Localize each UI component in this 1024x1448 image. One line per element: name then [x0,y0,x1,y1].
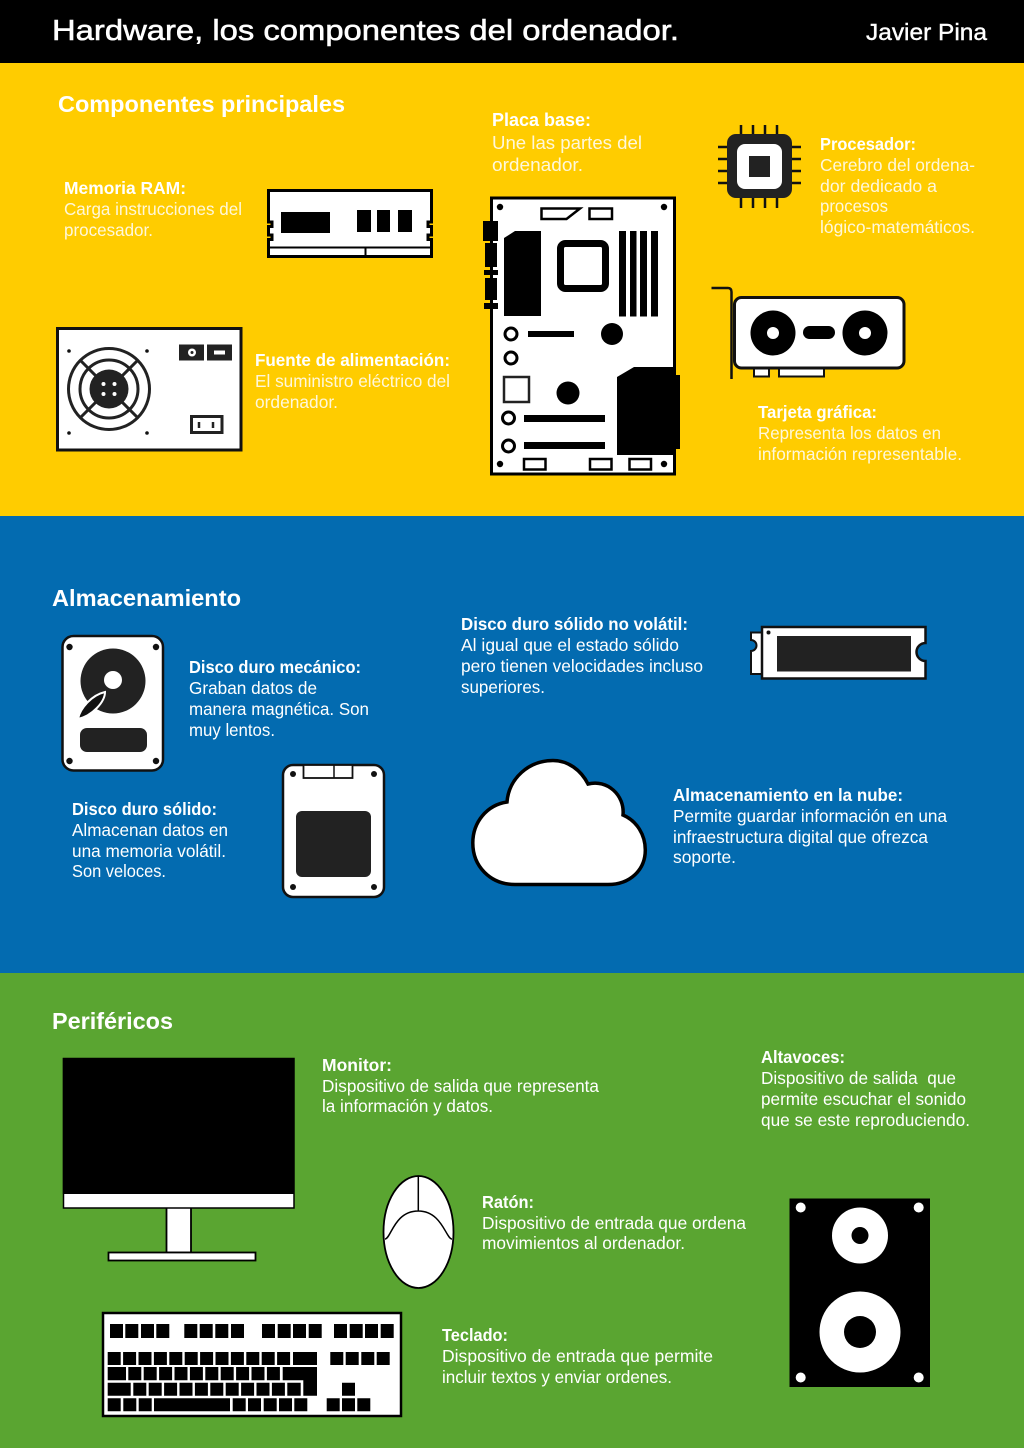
text block: altavoces: Dispositivo de salida que [761,1068,956,1088]
icon: hard disk drive [62,636,163,770]
text block: altavoces: que se este reproduciendo. [761,1110,970,1130]
text block: monitor: Monitor: [322,1055,392,1075]
text block: memoria RAM: Carga instrucciones del [64,199,242,219]
icon: RAM module [268,190,432,256]
text block: tarjeta gráfica: Tarjeta gráfica: [758,402,877,422]
section background: componentes principales [0,63,1024,516]
text block: disco duro sólido no volátil [461,614,703,697]
text block: teclado: Dispositivo de entrada que permite [442,1346,713,1366]
text block: tarjeta gráfica [758,402,962,464]
text block: procesador: Cerebro del ordena- [820,155,975,175]
text block: ratón: movimientos al ordenador. [482,1233,685,1253]
text block: monitor: la información y datos. [322,1096,493,1116]
text block: disco duro sólido: una memoria volátil. [72,841,226,861]
text block: procesador: Procesador: [820,134,916,154]
icon: graphics card [712,288,904,379]
text block: almacenamiento en la nube: infraestructura digital que ofrezca [673,827,928,847]
text block: almacenamiento en la nube [673,785,947,867]
text block: teclado: incluir textos y enviar ordenes. [442,1367,672,1387]
icon: keyboard [103,1313,401,1416]
text block: altavoces [761,1047,970,1130]
text block: memoria RAM [64,178,242,240]
icon: cloud [473,760,645,884]
section background: periféricos [0,973,1024,1448]
icon: processor [718,125,801,208]
text block: disco duro sólido: Son veloces. [72,861,166,881]
text block: memoria RAM: procesador. [64,220,153,240]
text block: disco duro sólido no volátil: Al igual que el estado sólido [461,635,679,655]
text block: disco duro sólido no volátil: Disco duro sólido no volátil: [461,614,688,634]
text block: monitor [322,1055,599,1116]
text block: fuente de alimentación [255,350,450,412]
text block: altavoces: permite escuchar el sonido [761,1089,966,1109]
text block: almacenamiento en la nube: Almacenamiento en la nube: [673,785,903,805]
text block: disco duro sólido no volátil: pero tienen velocidades incluso [461,656,703,676]
text block: disco duro sólido: Disco duro sólido: [72,799,217,819]
text block: ratón: Dispositivo de entrada que ordena [482,1213,746,1233]
text block: procesador: lógico-matemáticos. [820,217,975,237]
heading: periféricos: Periféricos [52,1008,173,1034]
icon: power supply [58,328,241,450]
icon: mouse [384,1176,454,1288]
text block: fuente de alimentación: ordenador. [255,392,338,412]
text block: ratón [482,1192,746,1253]
text block: teclado [442,1325,713,1387]
text block: disco duro sólido no volátil: superiores. [461,677,545,697]
text block: monitor: Dispositivo de salida que representa [322,1076,599,1096]
text block: procesador: dor dedicado a [820,176,937,196]
title: Hardware, los componentes del ordenador. [52,15,679,47]
text block: ratón: Ratón: [482,1192,534,1212]
text block: procesador [820,134,975,237]
text block: disco duro sólido [72,799,228,881]
text block: placa base: ordenador. [492,154,583,175]
text block: disco duro mecánico: Disco duro mecánico: [189,657,361,677]
text block: tarjeta gráfica: Representa los datos en [758,423,941,443]
text block: disco duro mecánico: muy lentos. [189,720,275,740]
section background: header [0,0,1024,63]
text block: placa base: Placa base: [492,109,591,130]
text block: altavoces: Altavoces: [761,1047,845,1067]
section background: almacenamiento [0,516,1024,973]
text block: procesador: procesos [820,196,888,216]
text block: disco duro mecánico: manera magnética. Son [189,699,369,719]
text block: placa base: Une las partes del [492,132,642,153]
icon: motherboard [483,198,680,474]
text block: placa base [492,109,642,175]
icon: monitor [63,1058,294,1260]
text block: fuente de alimentación: El suministro eléctrico del [255,371,450,391]
text block: teclado: Teclado: [442,1325,508,1345]
text block: almacenamiento en la nube: soporte. [673,847,736,867]
text block: memoria RAM: Memoria RAM: [64,178,186,198]
icon: M.2 NVMe drive [751,627,926,678]
text block: almacenamiento en la nube: Permite guardar información en una [673,806,947,826]
text block: disco duro mecánico: Graban datos de [189,678,317,698]
text block: disco duro sólido: Almacenan datos en [72,820,228,840]
text block: fuente de alimentación: Fuente de alimentación: [255,350,450,370]
author: Javier Pina [866,19,987,45]
heading: almacenamiento: Almacenamiento [52,585,241,611]
heading: componentes principales: Componentes principales [58,91,345,117]
text block: tarjeta gráfica: información representable. [758,444,962,464]
icon: speaker [790,1198,930,1387]
icon: solid state drive [283,765,384,897]
text block: disco duro mecánico [189,657,369,740]
